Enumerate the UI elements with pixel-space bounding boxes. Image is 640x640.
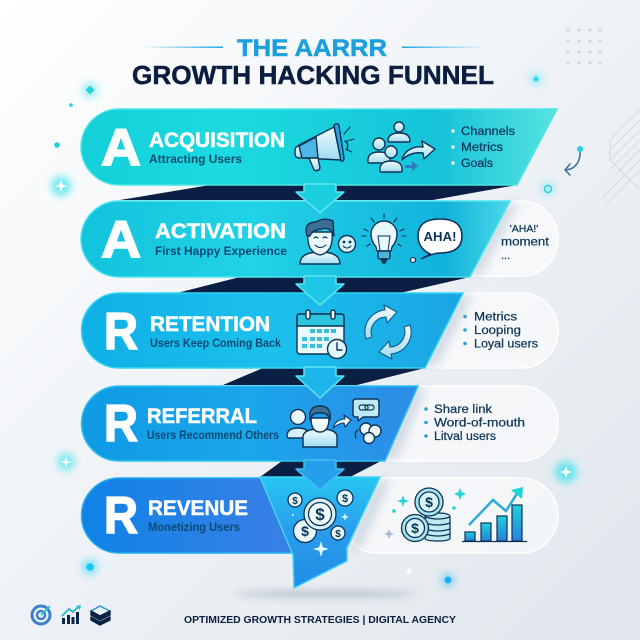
connector arrows xyxy=(296,184,344,490)
side panel: activation note: moment xyxy=(501,236,550,248)
letter A: A xyxy=(101,211,141,269)
side panel: activation note xyxy=(430,201,558,276)
side panel: retention list xyxy=(400,293,558,368)
letter R: R xyxy=(104,487,138,545)
list xyxy=(451,126,515,170)
icon: layered stack xyxy=(91,606,110,625)
icon: calendar with clock xyxy=(297,310,346,358)
band: activation xyxy=(81,201,510,277)
icon: falling coins xyxy=(288,490,353,557)
icon: target xyxy=(32,606,50,624)
list: Metrics xyxy=(461,142,503,154)
icon: light bulb xyxy=(362,214,406,263)
letter A: A xyxy=(101,119,141,177)
heading: RETENTION xyxy=(150,313,270,336)
icon: falling coins: $ xyxy=(301,523,309,539)
icon: growth bar chart xyxy=(462,487,527,542)
title: THE AARRR xyxy=(237,35,387,62)
icon: audience with arrow xyxy=(368,122,435,172)
icon: people referring xyxy=(287,399,381,447)
icon: curved arrow xyxy=(565,146,583,175)
icon: happy user xyxy=(300,219,356,264)
side panel: referral list: Share link xyxy=(434,404,492,416)
side panel: revenue xyxy=(340,478,558,553)
arrow: acquisition to activation xyxy=(296,184,344,213)
letter R: R xyxy=(104,303,138,361)
side panel: referral list xyxy=(360,386,558,461)
arrow: retention to referral xyxy=(296,367,344,398)
icon: falling coins: $ xyxy=(315,505,325,524)
side panel: retention list: Loyal users xyxy=(474,338,538,350)
subheading: Monetizing Users xyxy=(148,522,240,534)
title xyxy=(132,35,494,90)
funnel spout xyxy=(260,477,380,588)
funnel ground shadow xyxy=(233,590,417,598)
icon: falling coins: $ xyxy=(292,496,298,507)
side panel: activation note: 'AHA!' xyxy=(510,223,538,235)
icon: small growth chart xyxy=(62,605,81,624)
title: GROWTH HACKING FUNNEL xyxy=(132,60,494,90)
footer tagline: OPTIMIZED GROWTH STRATEGIES | DIGITAL AGENCY xyxy=(184,614,456,626)
side panel: referral list: Word-of-mouth xyxy=(434,418,525,430)
subheading: First Happy Experience xyxy=(155,246,287,258)
heading: REFERRAL xyxy=(147,405,257,428)
icon: falling coins: $ xyxy=(335,529,341,540)
dot grid decoration xyxy=(566,28,602,64)
side panel: referral list: Litval users xyxy=(434,431,496,443)
band: referral xyxy=(82,386,418,461)
side panel: retention list: Metrics xyxy=(474,312,517,324)
icon: AHA speech bubble: AHA! xyxy=(424,230,456,244)
icon: coin stack: $ xyxy=(411,520,419,536)
list: Channels xyxy=(461,126,515,138)
heading: REVENUE xyxy=(148,497,248,520)
arrow: referral to revenue xyxy=(296,460,344,490)
icon: AHA speech bubble xyxy=(410,219,462,262)
band: retention xyxy=(82,293,463,368)
subheading: Users Keep Coming Back xyxy=(150,338,282,350)
side panel: activation note: ... xyxy=(501,250,510,262)
letter R: R xyxy=(104,395,138,453)
icon: coin stack xyxy=(384,488,466,542)
arrow: activation to retention xyxy=(296,276,344,305)
subheading: Attracting Users xyxy=(149,154,242,166)
heading: ACQUISITION xyxy=(149,129,285,152)
hatch decoration xyxy=(602,110,640,204)
glowing accents xyxy=(51,73,577,587)
icon: falling coins: $ xyxy=(342,493,348,505)
band: revenue xyxy=(82,478,300,553)
band: acquisition xyxy=(81,109,557,185)
icon: megaphone xyxy=(295,124,354,171)
heading: ACTIVATION xyxy=(155,220,286,243)
subheading: Users Recommend Others xyxy=(147,430,279,442)
side panel: retention list: Looping xyxy=(474,325,521,337)
list: Goals xyxy=(461,158,493,170)
icon: coin stack: $ xyxy=(425,494,433,510)
icon: loop arrows xyxy=(365,305,411,359)
dark funnel gaps xyxy=(120,185,517,477)
band edge shadows xyxy=(348,203,518,548)
